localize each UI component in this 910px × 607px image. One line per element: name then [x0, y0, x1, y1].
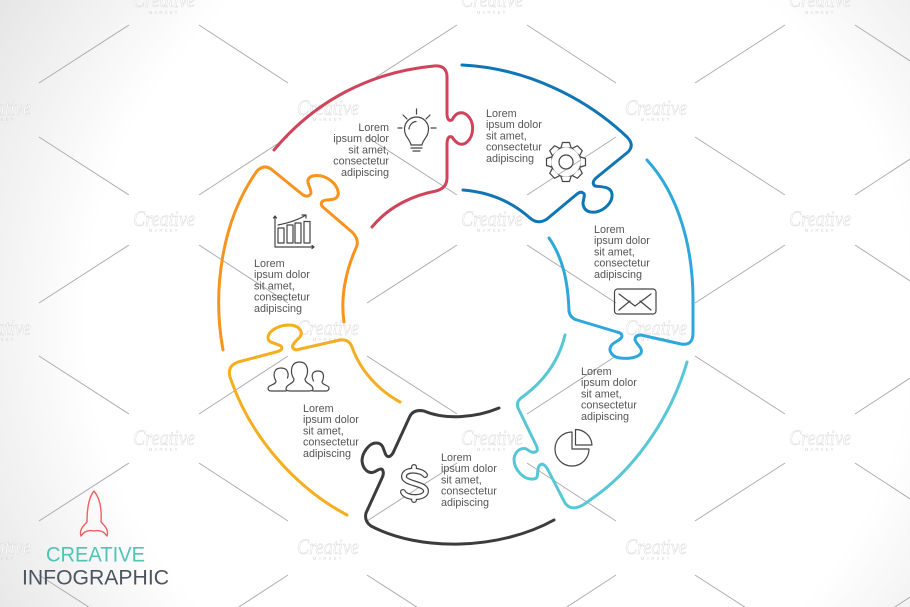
- icon: pie chart: [555, 429, 592, 466]
- text: orange segment: sit amet,: [254, 280, 295, 292]
- text: dark gray segment: sit amet,: [441, 474, 482, 486]
- text: light blue segment: adipiscing: [594, 269, 642, 281]
- watermarks: MARKET: [477, 10, 507, 15]
- text: teal segment: Lorem: [581, 366, 612, 378]
- text: orange segment: adipiscing: [254, 303, 302, 315]
- watermarks: MARKET: [641, 337, 671, 342]
- text: yellow segment: sit amet,: [303, 425, 344, 437]
- watermarks: Creative: [625, 315, 687, 340]
- text: red segment: adipiscing: [341, 167, 389, 179]
- heading: creative: CREATIVE: [46, 544, 145, 566]
- watermarks: Creative: [297, 95, 359, 120]
- watermarks: MARKET: [313, 556, 343, 561]
- text: dark gray segment: Lorem: [441, 452, 472, 464]
- icon: rocket: [80, 491, 108, 536]
- puzzle segment: yellow: [229, 325, 400, 515]
- icon: bar chart: [274, 215, 314, 248]
- watermarks: MARKET: [149, 10, 179, 15]
- text: blue segment: sit amet,: [486, 130, 527, 142]
- puzzle segment: dark gray: [362, 408, 554, 544]
- icon: people: [268, 362, 329, 391]
- heading: infographic: INFOGRAPHIC: [22, 566, 169, 590]
- watermarks: MARKET: [805, 228, 835, 233]
- text: blue segment: Lorem: [486, 108, 517, 120]
- icon: envelope: [614, 289, 656, 314]
- icon: gear: [546, 142, 586, 182]
- text: red segment: sit amet,: [348, 144, 389, 156]
- text: dark gray segment: consectetur: [441, 486, 497, 498]
- watermarks: MARKET: [149, 228, 179, 233]
- text: orange segment: ipsum dolor: [254, 269, 310, 281]
- text: dark gray segment: ipsum dolor: [441, 463, 497, 475]
- text: blue segment: adipiscing: [486, 153, 534, 165]
- text: teal segment: ipsum dolor: [581, 377, 637, 389]
- watermarks: MARKET: [313, 337, 343, 342]
- watermarks: Creative: [297, 534, 359, 559]
- text: yellow segment: adipiscing: [303, 448, 351, 460]
- text: teal segment: adipiscing: [581, 411, 629, 423]
- text: yellow segment: Lorem: [303, 403, 334, 415]
- watermarks: MARKET: [805, 10, 835, 15]
- watermarks: Creative: [789, 206, 851, 231]
- watermarks: Creative: [625, 534, 687, 559]
- text: dark gray segment: adipiscing: [441, 497, 489, 509]
- watermarks: MARKET: [477, 447, 507, 452]
- watermarks: MARKET: [805, 447, 835, 452]
- puzzle segment: light blue: [549, 160, 693, 358]
- puzzle segment: teal: [514, 335, 687, 508]
- icon: dollar sign: [403, 467, 426, 500]
- text: orange segment: consectetur: [254, 292, 310, 304]
- watermarks: MARKET: [641, 556, 671, 561]
- text: light blue segment: Lorem: [594, 224, 625, 236]
- watermarks: MARKET: [149, 447, 179, 452]
- watermarks: Creative: [789, 425, 851, 450]
- watermarks: Creative: [133, 206, 195, 231]
- watermarks: MARKET: [477, 228, 507, 233]
- text: red segment: Lorem: [358, 122, 389, 134]
- watermarks: Creative: [625, 95, 687, 120]
- puzzle segment: red: [274, 66, 473, 227]
- puzzle segment: blue: [462, 65, 631, 222]
- watermarks: Creative: [461, 425, 523, 450]
- text: teal segment: consectetur: [581, 400, 637, 412]
- watermarks: Creative: [461, 206, 523, 231]
- text: light blue segment: consectetur: [594, 258, 650, 270]
- text: light blue segment: ipsum dolor: [594, 235, 650, 247]
- text: red segment: consectetur: [333, 156, 389, 168]
- text: red segment: ipsum dolor: [333, 133, 389, 145]
- text: blue segment: ipsum dolor: [486, 119, 542, 131]
- text: yellow segment: ipsum dolor: [303, 414, 359, 426]
- watermarks: Creative: [297, 315, 359, 340]
- watermarks: MARKET: [313, 117, 343, 122]
- puzzle segment: orange: [219, 167, 357, 350]
- watermarks: Creative: [133, 425, 195, 450]
- icon: light bulb: [398, 109, 436, 151]
- text: blue segment: consectetur: [486, 142, 542, 154]
- text: orange segment: Lorem: [254, 258, 285, 270]
- text: teal segment: sit amet,: [581, 388, 622, 400]
- text: yellow segment: consectetur: [303, 437, 359, 449]
- watermarks: MARKET: [641, 117, 671, 122]
- text: light blue segment: sit amet,: [594, 246, 635, 258]
